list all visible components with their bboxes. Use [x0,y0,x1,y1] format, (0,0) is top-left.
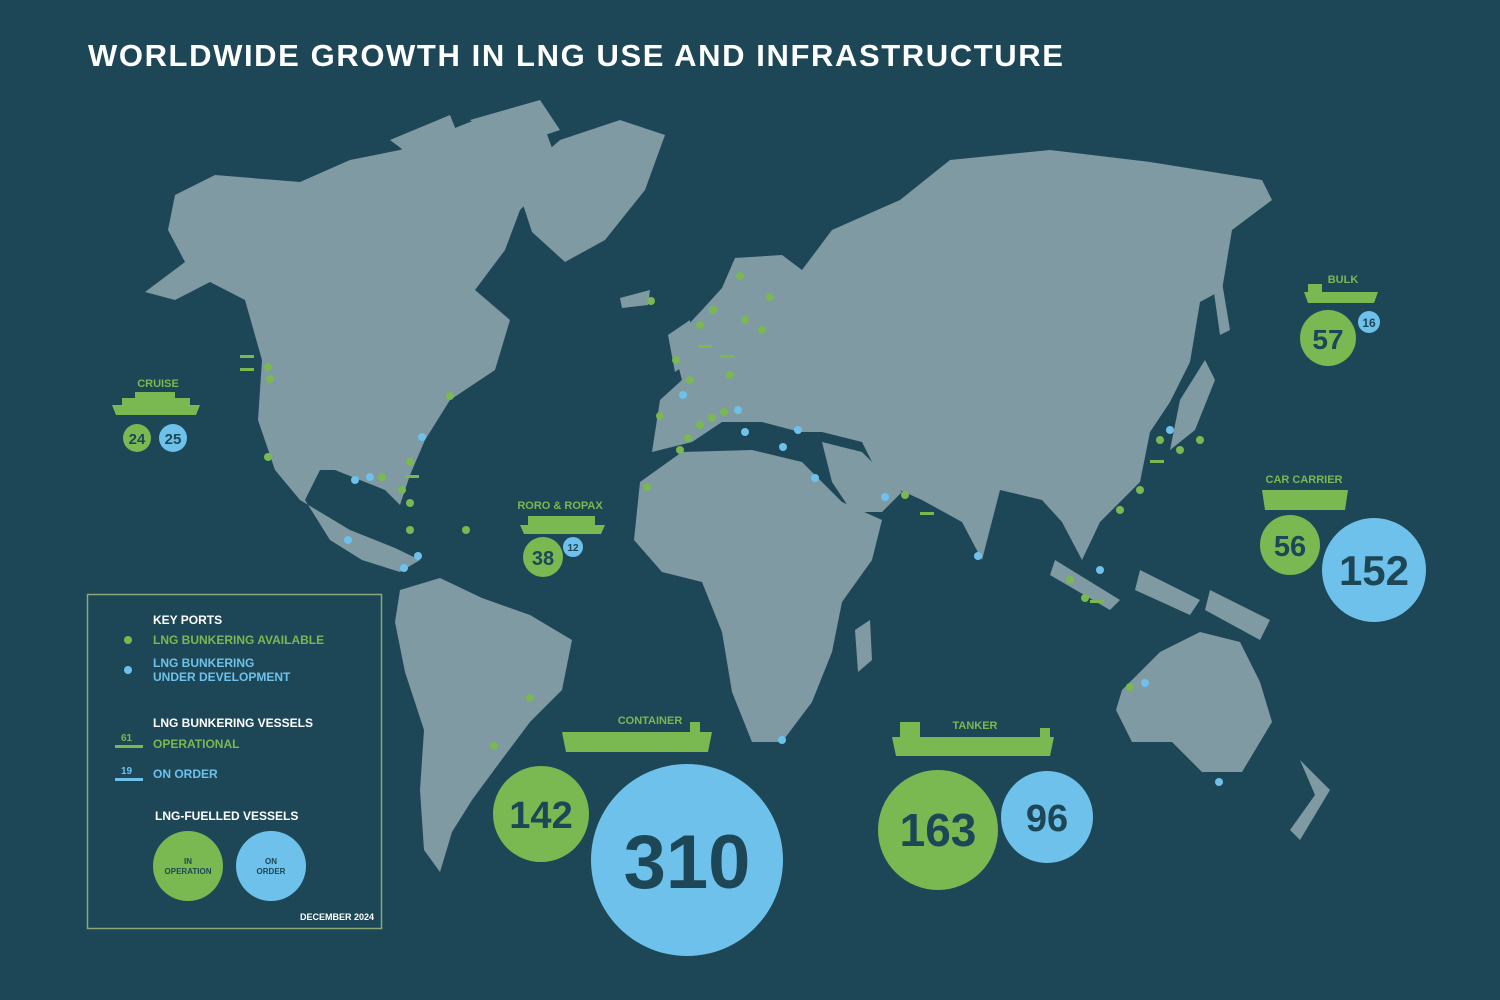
legend: LNG BUNKERING VESSELS [153,716,313,730]
circles: car carrier: 152 [1339,547,1409,594]
legend: 19 [121,766,133,777]
legend: DECEMBER 2024 [300,912,374,922]
legend: KEY PORTS [153,613,222,627]
title: WORLDWIDE GROWTH IN LNG USE AND INFRASTRUCTURE [88,38,1065,73]
circles: roro: 12 [567,543,579,554]
circles: car carrier [1260,515,1426,622]
legend: 61 [121,733,133,744]
circles: tanker: 96 [1026,798,1068,840]
world map [145,100,1330,872]
circles: roro [523,537,583,577]
legend: OPERATION [165,867,212,876]
ports: under development [344,391,1223,786]
circles: car carrier: 56 [1274,531,1306,563]
circles: cruise: 25 [165,431,181,448]
legend: ON [265,857,277,866]
legend: LNG BUNKERING [153,656,254,670]
ship: cruise: CRUISE [137,378,179,390]
circles: bulk: 16 [1362,316,1376,330]
ship: bulk: BULK [1328,274,1358,286]
circles: container: 310 [624,820,750,905]
circles: container: 142 [509,795,573,837]
circles: tanker: 163 [900,804,976,856]
circles: bulk: 57 [1312,324,1344,355]
legend: ON ORDER [153,767,218,781]
ship: cruise [112,378,200,415]
legend: ORDER [257,867,286,876]
legend [88,594,382,928]
circles: container [493,764,783,956]
ship: roro: RORO & ROPAX [517,500,603,512]
legend: LNG-FUELLED VESSELS [155,809,298,823]
circles: bulk [1300,310,1380,366]
ship: roro [517,500,605,534]
circles: cruise: 24 [129,431,146,448]
ship: car carrier [1262,474,1348,510]
ship: tanker: TANKER [952,720,998,732]
bunkering vessel marks [240,345,1164,603]
ship: car carrier: CAR CARRIER [1266,474,1343,486]
circles: tanker [878,770,1093,890]
ship: tanker [892,720,1054,756]
legend: OPERATIONAL [153,737,239,751]
ship: bulk [1304,274,1378,303]
legend: IN [184,857,192,866]
ports: available [264,272,1204,750]
circles: roro: 38 [532,548,554,570]
ship: container: CONTAINER [618,715,682,727]
circles: cruise [123,424,187,452]
ship: container [562,715,712,752]
legend: UNDER DEVELOPMENT [153,670,291,684]
legend: LNG BUNKERING AVAILABLE [153,633,324,647]
